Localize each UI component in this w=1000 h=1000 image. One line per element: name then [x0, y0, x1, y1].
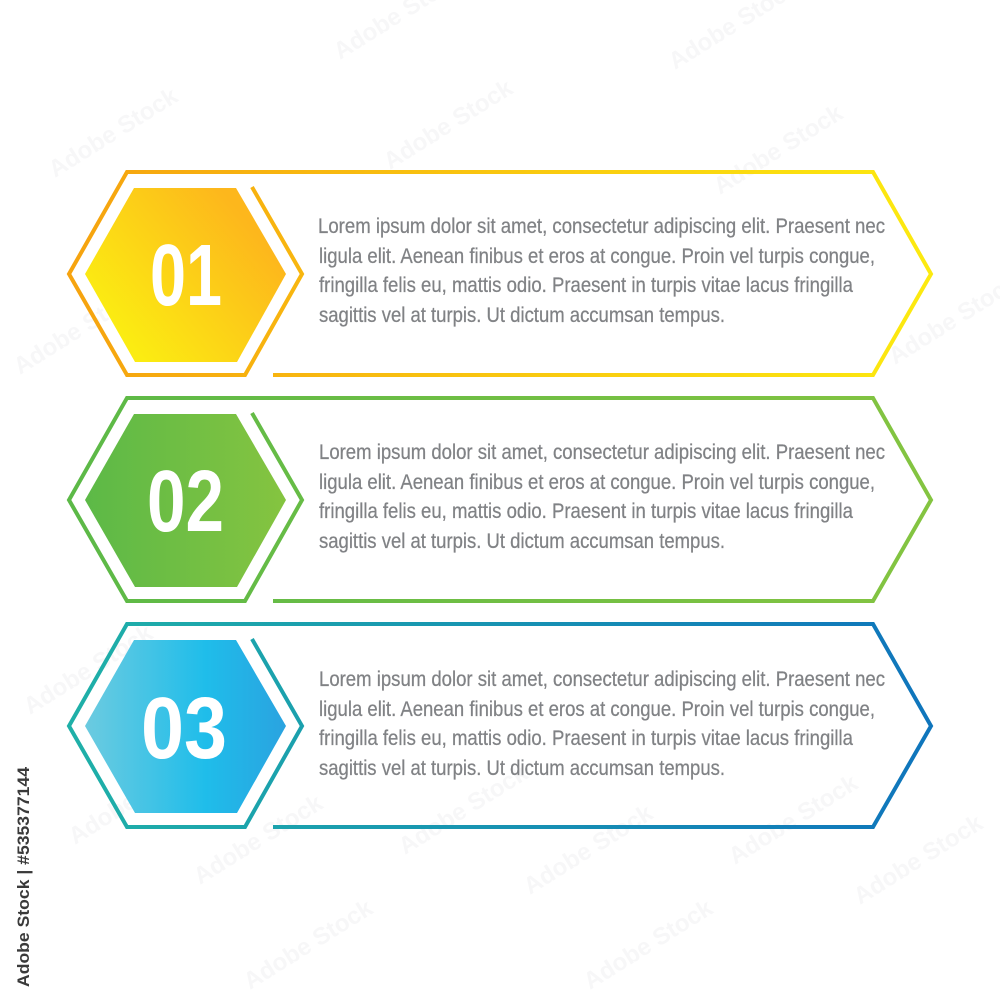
- text block 02: ligula elit. Aenean finibus et eros at congue. Proin vel turpis congue,: [319, 471, 875, 494]
- watermark pattern: Adobe Stock: [394, 759, 533, 860]
- panel: step 01: [69, 172, 931, 375]
- watermark pattern: Adobe Stock: [64, 749, 203, 850]
- number 03: 03: [141, 680, 227, 777]
- text block 03: Lorem ipsum dolor sit amet, consectetur adipiscing elit. Praesent nec: [319, 668, 885, 691]
- outline: step 03 arrow frame: [69, 624, 931, 827]
- text block 02: Lorem ipsum dolor sit amet, consectetur adipiscing elit. Praesent nec: [319, 441, 885, 464]
- text block 03: sagittis vel at turpis. Ut dictum accumsan tempus.: [319, 757, 725, 780]
- panel: step 02: [69, 398, 931, 601]
- icon: hexagon 02: [85, 414, 286, 587]
- text block 02: fringilla felis eu, mattis odio. Praesent in turpis vitae lacus fringilla: [319, 500, 853, 523]
- watermark pattern: Adobe Stock: [9, 279, 148, 380]
- watermark pattern: Adobe Stock: [239, 894, 378, 995]
- side stock id label: Adobe Stock | #535377144: [14, 766, 33, 987]
- watermark pattern: Adobe Stock: [189, 789, 328, 890]
- text block 01: fringilla felis eu, mattis odio. Praesent in turpis vitae lacus fringilla: [319, 274, 853, 297]
- watermark pattern: Adobe Stock: [579, 894, 718, 995]
- icon: hexagon 03: [85, 640, 286, 813]
- text block 03: fringilla felis eu, mattis odio. Praesent in turpis vitae lacus fringilla: [319, 727, 853, 750]
- text block 02: sagittis vel at turpis. Ut dictum accumsan tempus.: [319, 530, 725, 553]
- outline: step 01 arrow frame: [69, 172, 931, 375]
- number 02: 02: [147, 453, 224, 550]
- watermark pattern: Adobe Stock: [849, 809, 988, 910]
- text block 01: Lorem ipsum dolor sit amet, consectetur adipiscing elit. Praesent nec: [318, 215, 885, 238]
- text block 03: [319, 668, 885, 780]
- watermark pattern: Adobe Stock: [709, 99, 848, 200]
- number 01: 01: [150, 227, 222, 324]
- watermark pattern: Adobe Stock: [379, 74, 518, 175]
- watermark pattern: Adobe Stock: [19, 619, 158, 720]
- icon: hexagon 01: [85, 188, 286, 362]
- watermark pattern: Adobe Stock: [44, 82, 183, 183]
- panel: step 03: [69, 624, 931, 827]
- text block 03: ligula elit. Aenean finibus et eros at congue. Proin vel turpis congue,: [319, 698, 875, 721]
- outline: step 02 arrow frame: [69, 398, 931, 601]
- watermark pattern: Adobe Stock: [724, 769, 863, 870]
- text block 02: [319, 441, 885, 553]
- watermark pattern: Adobe Stock: [519, 799, 658, 900]
- text block 01: ligula elit. Aenean finibus et eros at congue. Proin vel turpis congue,: [319, 245, 875, 268]
- text block 01: [318, 215, 885, 327]
- text block 01: sagittis vel at turpis. Ut dictum accumsan tempus.: [319, 304, 725, 327]
